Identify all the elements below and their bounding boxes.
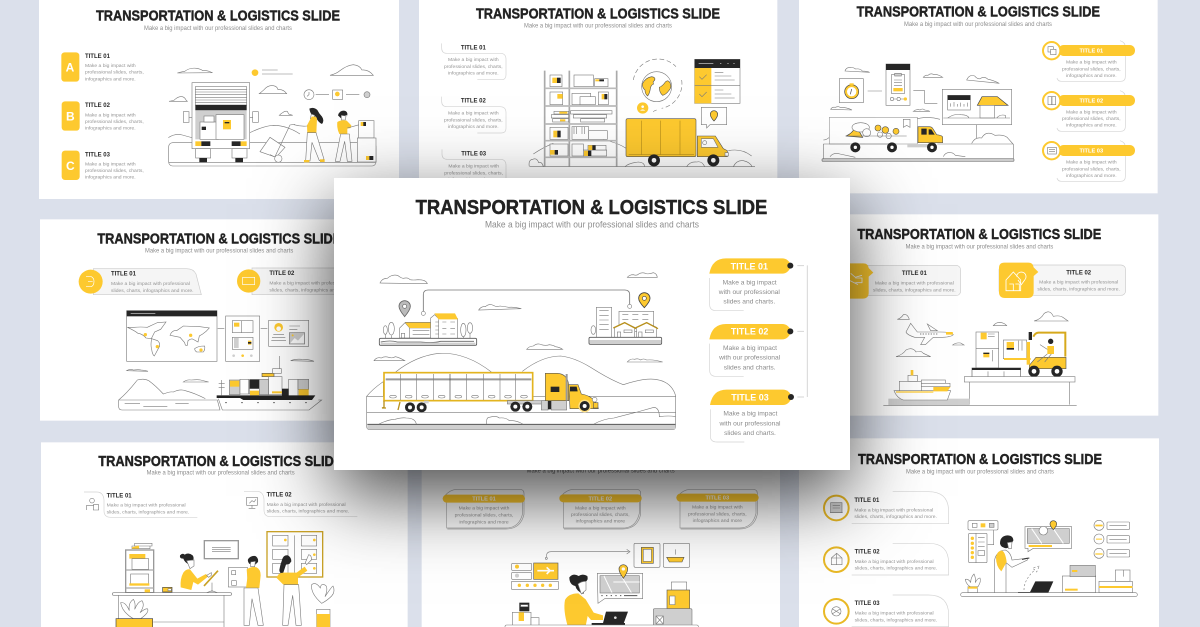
- item: title 02: with our professional: [718, 355, 781, 362]
- item 03: professional slides, charts,: [1062, 166, 1121, 172]
- item 01: [84, 492, 197, 517]
- item C: professional slides, charts,: [85, 168, 144, 174]
- item 01: professional slides, charts,: [455, 513, 513, 519]
- item B: B: [66, 110, 75, 124]
- item 01: Make a big impact with professional: [107, 503, 186, 509]
- item: title 03: slides and charts.: [724, 430, 776, 437]
- item 01: TITLE 01: [854, 498, 880, 504]
- panel: slide middle right: Make a big impact with our professional slides and charts: [906, 244, 1053, 250]
- item 01: Make a big impact with: [1066, 60, 1117, 66]
- checklist: [695, 59, 740, 103]
- item 01: Make a big impact with professional: [854, 507, 933, 513]
- item 02: infographics and more: [576, 519, 625, 525]
- illustration: world map and ship: [119, 311, 322, 410]
- item 03: TITLE 03: [1080, 149, 1103, 155]
- item 02: infographics and more.: [448, 124, 499, 130]
- item 02: Make a big impact with professional: [267, 502, 346, 508]
- clouds: [374, 273, 663, 362]
- item A: A: [66, 61, 75, 75]
- item 01: infographics and more.: [1066, 73, 1117, 79]
- illustration: delivery truck with produce: [822, 64, 1014, 161]
- item 01: infographics and more.: [448, 71, 499, 77]
- item A: TITLE 01: [85, 54, 111, 60]
- item A: infographics and more.: [85, 76, 136, 82]
- illustration: man at laptop with boxes: [961, 520, 1137, 597]
- item 03: TITLE 03: [706, 496, 729, 502]
- item 01: TITLE 01: [472, 497, 496, 503]
- heading: middle right slide: TRANSPORTATION & LOGISTICS SLIDE: [857, 227, 1102, 243]
- item C: [62, 151, 144, 181]
- subheading: central: Make a big impact with our professional slides and charts: [485, 219, 699, 229]
- item: title 03: with our professional: [718, 420, 781, 427]
- item 03: professional slides, charts,: [444, 170, 503, 176]
- item 02: Make a big impact with: [575, 505, 626, 511]
- item A: Make a big impact with: [85, 63, 136, 69]
- bracket connector: [797, 265, 807, 397]
- cart with box: [260, 137, 285, 157]
- item 02: TITLE 02: [267, 493, 292, 499]
- subtitle: bottom middle slide: Make a big impact with our professional slides and charts: [527, 469, 675, 475]
- illustration: office workers: [112, 532, 334, 627]
- man: [338, 111, 347, 119]
- panel: slide top right: [799, 0, 1158, 193]
- panel: slide top right: Make a big impact with our professional slides and charts: [904, 22, 1052, 28]
- illustration: plane, ship and forklift: [883, 312, 1077, 406]
- panel: slide bottom right: Make a big impact with our professional slides and charts: [906, 469, 1054, 475]
- panel: slide middle left: [40, 219, 407, 421]
- illustration: woman at laptop: [505, 543, 698, 627]
- item 01: slides, charts, infographics and more.: [873, 287, 956, 293]
- item 01: [79, 269, 201, 295]
- panel: slide top left: [39, 0, 399, 199]
- item 02: Make a big impact with professional: [269, 280, 348, 286]
- item 01: infographics and more: [459, 520, 509, 526]
- panel: slide bottom left: Make a big impact with our professional slides and charts: [147, 471, 295, 477]
- heading: top middle slide: TRANSPORTATION & LOGISTICS SLIDE: [476, 6, 720, 22]
- panel: slide bottom right: [799, 438, 1159, 627]
- globe: [642, 72, 672, 102]
- item 03: infographics and more.: [1066, 173, 1117, 179]
- item: title 02: TITLE 02: [731, 327, 768, 337]
- item A: [61, 52, 144, 82]
- heading: central title: TRANSPORTATION & LOGISTICS SLIDE: [416, 197, 767, 219]
- item 03: professional slides, charts,: [688, 511, 747, 517]
- item 02: [442, 97, 506, 133]
- item: title 03: TITLE 03: [731, 392, 769, 402]
- illustration: semi truck: [382, 373, 598, 412]
- item 01: TITLE 01: [107, 493, 132, 499]
- item 03: TITLE 03: [461, 152, 487, 158]
- item: title 01: slides and charts.: [723, 299, 775, 306]
- item C: Make a big impact with: [85, 161, 136, 167]
- item 03: Make a big impact with: [448, 164, 499, 170]
- panel: slide bottom middle: [422, 463, 780, 627]
- item 02: TITLE 02: [1066, 270, 1092, 276]
- heading: top left slide: TRANSPORTATION & LOGISTICS SLIDE: [96, 9, 340, 25]
- item A: professional slides, charts,: [85, 70, 144, 76]
- item 02: slides, charts, infographics and more.: [269, 287, 352, 293]
- item: title 01: with our professional: [718, 289, 780, 296]
- item 01: TITLE 01: [461, 45, 486, 51]
- item 03: Make a big impact with: [1066, 160, 1117, 166]
- panel: slide middle right: [807, 214, 1158, 416]
- panel: slide top middle: [419, 0, 777, 213]
- illustration: truck rear and workers: [168, 65, 376, 166]
- truck: [626, 119, 696, 157]
- item 02: TITLE 02: [1080, 99, 1103, 105]
- item 03: [1043, 141, 1135, 181]
- item 01: TITLE 01: [902, 271, 927, 277]
- icon: grey location pin: [399, 301, 410, 317]
- item 02: [237, 268, 367, 295]
- item 02: Make a big impact with: [448, 110, 499, 116]
- item 01: slides, charts, infographics and more.: [107, 509, 189, 515]
- illustration: left town: [379, 313, 477, 345]
- panel: slide middle left: Make a big impact with our professional slides and charts: [145, 248, 293, 254]
- illustration: right town: [589, 307, 662, 344]
- item 01: [442, 43, 506, 80]
- item 02: professional slides, charts,: [1062, 116, 1121, 122]
- illustration: warehouse shelves: [529, 59, 755, 167]
- panel: slide bottom left: [41, 442, 408, 627]
- item 01: professional slides, charts,: [1062, 66, 1121, 72]
- item 03: [442, 149, 506, 183]
- heading: middle left slide: TRANSPORTATION & LOGISTICS SLIDE: [97, 231, 342, 247]
- item 01: [833, 263, 961, 299]
- item 02: slides, charts, infographics and more.: [1037, 287, 1120, 293]
- item: title 02: Make a big impact: [723, 345, 777, 352]
- item 01: TITLE 01: [111, 272, 137, 278]
- panel: slide top left: Make a big impact with our professional slides and charts: [144, 26, 292, 32]
- item B: infographics and more.: [85, 126, 136, 132]
- item 02: Make a big impact with professional: [855, 559, 934, 565]
- item C: C: [66, 159, 75, 173]
- item 02: Make a big impact with professional: [1039, 280, 1118, 286]
- item 02: slides, charts, infographics and more.: [855, 566, 937, 572]
- item C: infographics and more.: [85, 175, 136, 181]
- woman: [309, 108, 323, 124]
- item 03: infographics and more: [693, 518, 742, 524]
- item: title 02: [709, 324, 793, 376]
- item 02: [559, 489, 642, 529]
- item: title 03: [710, 390, 794, 442]
- item B: Make a big impact with: [85, 112, 136, 118]
- item: title 03: Make a big impact: [723, 410, 777, 417]
- pin callout: [701, 107, 727, 128]
- item 02: TITLE 02: [461, 99, 486, 105]
- item 02: infographics and more.: [1066, 123, 1117, 129]
- item 02: professional slides, charts,: [444, 117, 503, 123]
- item: title 01: [709, 258, 793, 311]
- item 01: slides, charts, infographics and more.: [854, 514, 937, 520]
- item 02: TITLE 02: [589, 496, 612, 502]
- item: title 01: TITLE 01: [731, 261, 768, 271]
- item 01: slides, charts, infographics and more.: [111, 288, 194, 294]
- heading: top right slide: TRANSPORTATION & LOGISTICS SLIDE: [857, 5, 1100, 21]
- item C: TITLE 03: [85, 152, 111, 158]
- item 03: TITLE 03: [855, 601, 880, 607]
- item 02: [1043, 91, 1135, 131]
- heading: bottom left slide: TRANSPORTATION & LOGISTICS SLIDE: [98, 454, 343, 470]
- item B: professional slides, charts,: [85, 119, 144, 125]
- item: title 02: slides and charts.: [724, 364, 776, 371]
- route connector: [421, 290, 632, 315]
- item 03: Make a big impact with professional: [855, 611, 934, 617]
- item 03: [676, 489, 759, 529]
- drop shadow of central slide: [334, 178, 850, 470]
- item 03: [824, 595, 949, 627]
- item 02: [999, 263, 1126, 298]
- heading: bottom right slide: TRANSPORTATION & LOGISTICS SLIDE: [858, 452, 1102, 468]
- item B: [62, 101, 144, 132]
- item 01: [824, 492, 949, 524]
- item 02: TITLE 02: [269, 271, 295, 277]
- item B: TITLE 02: [85, 103, 111, 109]
- item 02: TITLE 02: [855, 550, 880, 556]
- item 01: TITLE 01: [1080, 49, 1103, 55]
- item 03: Make a big impact with: [692, 505, 743, 511]
- item 01: Make a big impact with: [448, 57, 499, 63]
- item 02: Make a big impact with: [1066, 109, 1117, 115]
- item 01: [443, 489, 525, 529]
- item 03: infographics and more.: [448, 177, 499, 183]
- item 01: [1043, 41, 1135, 81]
- item 02: slides, charts, infographics and more.: [267, 509, 349, 515]
- item 02: professional slides, charts,: [571, 512, 630, 518]
- item 02: [244, 491, 357, 517]
- item 01: professional slides, charts,: [444, 64, 503, 70]
- illustration: landscape and road: [367, 353, 676, 430]
- item 01: Make a big impact with professional: [875, 280, 954, 286]
- item: title 01: Make a big impact: [723, 279, 777, 286]
- icon: yellow location pin: [639, 293, 650, 308]
- panel: slide top middle: Make a big impact with our professional slides and charts: [524, 24, 672, 30]
- item 03: slides, charts, infographics and more.: [855, 617, 937, 623]
- item 01: Make a big impact with: [459, 506, 510, 512]
- panel: central slide: [334, 178, 850, 470]
- item 02: [824, 543, 949, 575]
- item 01: Make a big impact with professional: [111, 281, 190, 287]
